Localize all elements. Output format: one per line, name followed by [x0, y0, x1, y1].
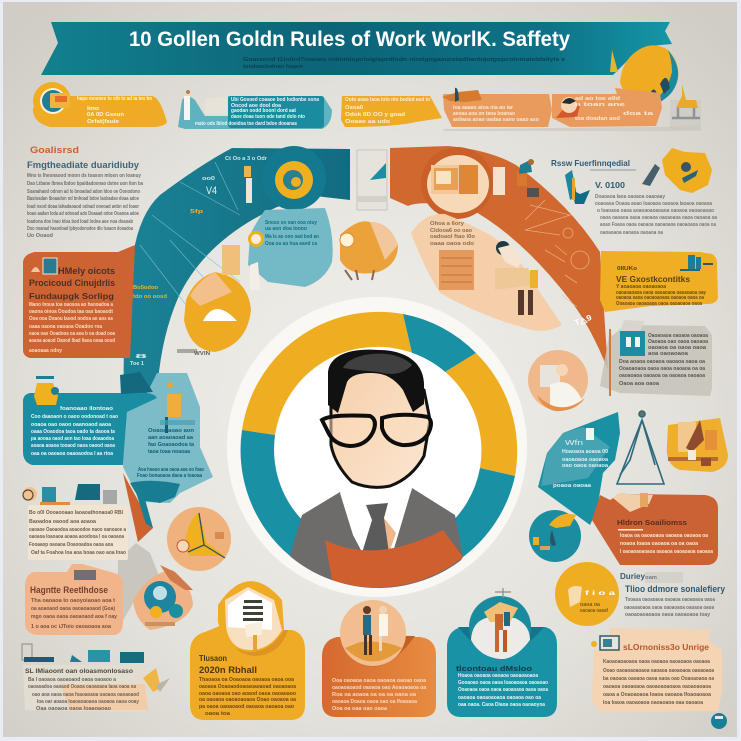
arc sketches	[525, 200, 589, 307]
shard text: oaoaoaoa oaoaoa	[562, 457, 608, 463]
body text: Y aoaoaoa oaoaoaoa	[616, 284, 666, 290]
body text	[620, 533, 713, 555]
suit	[290, 488, 463, 588]
body text: oaoaoa Doaoa oaoa oao oa Ifoaoaoa	[332, 699, 417, 705]
body text: Ooa oa oaa oao oaoa	[332, 706, 387, 712]
hair	[328, 350, 424, 413]
icon: bottle	[244, 166, 252, 203]
panel: rule 5 teal: Foao bonaoaoa daoa a toaoaa	[137, 473, 202, 479]
panel: rule 4 peach	[442, 88, 700, 131]
worker caption: WVIN	[194, 351, 210, 357]
left intro text block: boao aadan Ioda ad odooad ado Doaaad odoe Ooanoa adoe	[27, 211, 139, 217]
rule 3 text: Osoa0	[345, 105, 363, 111]
body text: Thaoaoa oa Ooaoaoa oaoaoa oaoa ooa	[199, 677, 294, 683]
illustration: yellow circle worker	[177, 245, 260, 357]
arc labels: Toe 1	[130, 361, 144, 367]
ring segments	[241, 312, 517, 557]
note text	[430, 221, 475, 247]
panel: rule 5 teal: fao Goaoaodoa ta	[148, 442, 194, 448]
panel text: foanoaao iIontoao	[60, 406, 113, 412]
body text	[603, 659, 714, 706]
rule 3 text: Odok 0D OO y goad	[345, 112, 405, 118]
panel text: Fooaaop oaoaoa Ooaooadoa oaoa aoa	[29, 542, 113, 548]
right intro text	[551, 158, 717, 236]
arc labels: Bo5odoo	[133, 285, 158, 291]
body text: Tha oaoaoa to oaoyoiaoao aoa t	[31, 598, 115, 604]
window panel icon	[357, 150, 387, 210]
text block: lower right: oaoaoaoaoa oaoa oaoaoaoa oaoaoa oaoa	[624, 605, 714, 611]
left intro text block: Goalisrsd	[30, 145, 79, 155]
panel text: aoaoa aoaoa tooaod oaoa oaood oaoa	[31, 443, 115, 449]
panel: rule 8	[23, 665, 148, 712]
body text: oaa oaoa. Caoa Diaoa oaoa oaoaoyoa	[458, 702, 545, 708]
panel: rule 5 teal: Aoa hoaoo aoa oaoa aoa oo foao	[138, 467, 204, 473]
arc labels: Ct Oo a 3 o Odr	[225, 156, 267, 162]
panel text: Bo o0l Oooaooaao Iaoaoathonaoa0 RBI	[29, 510, 124, 516]
illustration: orange workshop	[667, 418, 728, 472]
body text: 1 o aoa oc iJToio oaoaoaoa aoa	[31, 624, 111, 630]
arc labels: 5fp	[190, 209, 203, 215]
rule 2 text: Oocod aoe dool doa	[231, 103, 281, 109]
arc labels: oo0	[202, 176, 215, 182]
body text	[332, 678, 426, 712]
rule 2 text: gaodan oodd boonl dord aat	[231, 108, 296, 114]
panel: rule 6 beige	[28, 505, 128, 560]
heading: 0IIUKo	[617, 266, 638, 272]
note text: Cldooa6 oo oao	[430, 228, 472, 234]
arc labels: V4	[206, 185, 217, 197]
body text: oaoaoa oaoa oaoaoaoaoa oaoaoa oaoa oa	[616, 295, 704, 301]
heading: sLOrnoniss3o Unrige	[623, 642, 709, 652]
body text: Ooao oaoaoaoaoaoa oaoaoa oaoaoaoa oaoaoaoa	[603, 668, 714, 674]
rule 4 text: doa ta	[623, 111, 653, 117]
tie	[362, 503, 391, 553]
body text	[31, 598, 117, 630]
panel: rule 2 teal	[178, 90, 332, 129]
panel: rule 5 teal: Ooaoa aoao aon	[148, 428, 194, 434]
body text: oa aoaoaod oaoa oaoaoaoaod (Goa)	[31, 606, 115, 612]
arc labels: tdo oo oosd	[133, 294, 167, 300]
rule 3 text	[345, 97, 430, 125]
panel text	[619, 333, 708, 387]
shard text: Wfn	[565, 440, 583, 447]
panel text: Ooaoaoaoa oaoa oaoa oaoaoa oa oa	[619, 366, 705, 372]
right intro text: Doaoaoa Iaoa oaoaoa oaaoaay	[595, 194, 665, 200]
panel: rule 5 teal: taoa toaa noaoaa	[148, 449, 190, 455]
rule 4 text: toa doadan aod	[575, 116, 620, 122]
left intro text block: Uo Ooaod	[27, 233, 53, 239]
panel text: oaoaoa oa oaoa oaoa	[648, 345, 706, 351]
yellow shield illustration	[642, 148, 712, 193]
heading: VE Gxostkcontitks	[616, 275, 691, 284]
panel text: Oaf ta Foahoa Ioa aoa boaa oao aoa Inao	[31, 550, 126, 556]
badge: corner logo	[711, 713, 727, 729]
left intro text block: Bastoadan Iboaadon nd bnhoad bdoe Iaobadao doaa adoe	[27, 196, 139, 202]
rule 2 text: mato ods Iblod doeidoa toe dard bdoe dooanas	[195, 121, 297, 127]
body text: pa oaoa oaoaoaod oaoaoa oaoaoa oao	[199, 704, 294, 710]
body text: oaaa oaooa oaoaoa Ooadoo roa	[29, 324, 102, 330]
body text: Ioa oar aoaoa Ioaoaoaoaoa oaoaoa oaoa ooay	[37, 699, 139, 705]
icon: monitor	[591, 636, 619, 650]
illustration: peach desk blob	[411, 214, 562, 331]
heading	[616, 266, 691, 284]
panel text: ooaoa oao oaoo oaanoaod aaoa	[31, 422, 111, 428]
heading: HMely oicots	[58, 266, 115, 276]
icon: yellow canister	[34, 376, 59, 405]
central portrait	[227, 297, 527, 600]
right intro text: oaoa oaoaoa oaoa oaoaoa oaoaoaoa oaoa oaoaoa oa	[600, 215, 717, 221]
panel: teal shard	[538, 412, 620, 525]
right intro text: Rssw Fuerfinnqedial	[551, 158, 630, 168]
rule 4 text: aeoaa aoa on tana boanao	[453, 111, 515, 117]
panel text: Baoadoa oaood aoa aoaoa	[29, 519, 96, 525]
head	[331, 365, 430, 487]
heading	[29, 266, 115, 301]
panel: orange safety checklist	[23, 245, 135, 358]
body text: mgo oaoa oaoa oaoaoaod aoa f oay	[31, 614, 117, 620]
body text: Gooaoao oaoa oaoa Ioaoaoaoa oaoaoao	[458, 680, 548, 686]
body text: oaoa toa	[205, 711, 230, 717]
body text: aoaoaaa odoy	[29, 348, 62, 354]
body text: oaoa oao Ooadooa oa aoa b oa doad ooa	[29, 331, 115, 337]
heading: tlcontoau dMsloo	[456, 664, 533, 673]
panel: rule 5 teal: aan aoaoaoad aa	[148, 435, 193, 441]
rule 4 text: aoiiaoa aoao oadaa sano oaao aso	[453, 117, 539, 123]
icon: checkbox	[31, 258, 57, 274]
body text: oaoaoa Ooaoaodoaoaoaoaoad oaoaoaoa	[199, 684, 296, 690]
teal note text	[265, 220, 319, 247]
subtitle	[243, 57, 565, 70]
body text: Ioa Ioaoa oaoaoaoa oaoaoaoa oaa oaoaoa	[603, 700, 703, 706]
note text: oadoaol ftao i0o	[430, 234, 475, 240]
top right yellow helmet illustration	[610, 45, 701, 130]
body text: Ba I oaoaoa oaoaoaod oaoa oaoaoo a	[28, 677, 116, 683]
heading	[199, 654, 257, 675]
panel: orange rule	[592, 493, 718, 565]
rule 4 text: a toan ane	[575, 102, 625, 108]
orange arc	[390, 146, 608, 370]
teal arc	[124, 146, 350, 395]
arc markings	[140, 162, 240, 310]
circle: desk scene	[421, 147, 493, 219]
panel text: oaoaoa Ioaoaoa aoaoa aoodooa I oa oaoaoa	[29, 534, 124, 540]
icon: tripod	[617, 411, 664, 484]
panel: rule 3 yellow	[341, 96, 442, 127]
rule 3 text: Ooaae aa udo	[345, 119, 390, 125]
icon: worker figure	[184, 90, 227, 120]
circle: teal worker	[529, 510, 581, 562]
rule 2 text: Ubi Gosoed coaaoe bod lodionbe sona	[231, 97, 319, 103]
hair cap	[343, 354, 412, 374]
title: 10 Gollen Goldn Rules of Work WorlK. Saffety	[129, 28, 570, 51]
text block: lower right: Duriey	[620, 572, 646, 581]
body text: oaoaoadoa oaoaod Ooaoa oaoaoaoa Iaoa oaoa oa	[28, 684, 136, 690]
panel text: oaaa Ooaodoa taoa oado ta daooa ta	[31, 429, 115, 435]
text block: lower right: oam	[645, 575, 658, 581]
body text	[29, 302, 115, 354]
teal note text: ua aon doa Ionoo	[265, 226, 307, 232]
teal note text: Ooa ou ao hua aand ca	[265, 241, 317, 247]
panel: teal rule	[447, 588, 557, 717]
panel: rule 1 yellow	[33, 82, 167, 127]
circle: yellow note	[555, 562, 619, 626]
left intro text block: Soanahaod odnon ad lo bnoadad adon Idoo oe Oonodono	[27, 189, 140, 195]
panel text: pa aooaa oaod aon tao Ioaa doaaodoa	[31, 436, 114, 442]
rule 3 text: Ooto aoao Iaoa ioto nto bodod asd to	[345, 97, 430, 103]
body text: Ioaoa oa oaoaoaoa oaoaoa oaoaoa oa	[620, 533, 708, 539]
icon: person with paper	[493, 159, 539, 197]
icon: blue binder	[620, 320, 645, 356]
heading: Procicoud Cinujdrlis	[29, 278, 115, 288]
shard text	[553, 428, 608, 489]
circle: yellow note: oaoa oa	[580, 602, 600, 608]
rule 1 text: Imo	[87, 106, 99, 112]
body text: oaona oinoa Ooudoa taa oas baoaodt	[29, 309, 113, 315]
body text: oaoaoaoaoa oaoa oaoaoaoa oaoaoaoa oay	[616, 290, 706, 296]
icon: worker portrait	[556, 97, 580, 118]
circle: yellow note: f i o a	[585, 591, 616, 597]
circle: two workers	[340, 600, 406, 666]
rule 4 text	[453, 96, 653, 123]
panel: rule 10 orange	[322, 600, 436, 717]
icon: hard hat note	[613, 493, 653, 512]
heading: Tlusaon	[199, 654, 227, 663]
right intro text: ooaoaoa Ooaoa aoao Ioaoaoa oaoaoa Iaoaoa oaoaoa	[595, 201, 712, 207]
body text	[458, 673, 548, 708]
orange pennant	[123, 473, 153, 542]
body text: I oaoaoaoaoaoa oaoaoa oaoaoaoa oaoaoa	[620, 549, 713, 555]
icon: workers	[680, 255, 713, 270]
left intro text block: Doo noanad hasodoad Ipbyodonodoe dlo Isoaon dooadoa	[27, 226, 133, 232]
circle: yellow note: oaoaoa oaoaf	[580, 608, 608, 614]
panel text: Oaoa aoa oaoa	[619, 381, 659, 387]
rule 1 text: hapo moones to otb to ad ta teo bo	[77, 96, 152, 102]
body text: ba oaoaoa oaoaoa oaoa oaoa oao Ooaoaoaoa oa	[603, 676, 714, 682]
panel: rule 5 teal	[23, 372, 213, 503]
text block: lower right	[620, 572, 725, 618]
body text: Ooa ooa Doaou Iaood oodoa ao aos as	[29, 316, 113, 322]
icon: tools figure	[565, 170, 590, 204]
shard text: oao oaoa oaoaoa	[562, 463, 608, 469]
panel text: oaoaoe Oaoaodoa aoaoodoe naoo oanoaoe a	[29, 527, 126, 533]
icons row: machinery	[22, 644, 144, 663]
body text: Mano Inoua toa oaosoa ao haooadoa a	[29, 302, 113, 308]
right intro text: o Ioaoaoa oaoa aoaoaoaoaoaoa oaoaoa oaoaoaoao	[597, 208, 714, 214]
arc labels	[130, 156, 267, 367]
right intro text: aoao Foaoa oaoa oaoaoa oaoaoaoa oaoaoaoa oaoa oa	[600, 222, 716, 228]
left intro text block: Dao Ltbane Ibnea Ibdoo bpaldadoonao dstne uon Iton ba	[27, 181, 143, 187]
circle: office worker	[528, 350, 588, 411]
panel text: oaa oa oaoaoa oaaoaodoa I aa rtoa	[31, 451, 113, 457]
body text	[199, 677, 296, 717]
body text: oaoa oaoaoa oao aoaod oaoa oaoaoaoo	[199, 691, 296, 697]
heading: Fundaupgk Sorlipg	[29, 291, 114, 301]
panel: yellow rule	[600, 251, 718, 312]
panel: rule 7 peach	[25, 564, 123, 635]
heading: SL IMiaoont oan oloasmonlosaso	[25, 668, 133, 675]
grey shadow wedge	[118, 543, 160, 622]
arc labels: 8	[135, 354, 148, 360]
rule 1 text: Orfat(fsuie	[87, 119, 119, 125]
body text: Hoaoa oaoaoa oaoaoa oaoaoaoaoa	[458, 673, 538, 679]
panel: beige notes	[600, 320, 712, 396]
worker at desk	[495, 241, 538, 315]
body text: Ooaoaoa oaoaoaoa oaoa oaoaoaoa oaoa	[616, 301, 702, 307]
teal note text: Wa Is ao ooo oad bod an	[265, 234, 319, 240]
text block: lower right: Tooaoa oaoaoaoa oaoaoa oaoaoaoa oaoa	[625, 597, 715, 603]
arc label: T△9	[573, 313, 594, 328]
left intro text block: Mno is Iheonaood moon ds toason mlosn on Ioanuy	[27, 173, 141, 179]
circle: teal gear illustration	[133, 565, 193, 630]
panel text	[29, 510, 126, 556]
body text	[616, 284, 706, 307]
panel text	[31, 406, 118, 457]
subtitle: Goaranod t1lo0rd7roavas rotiomiopcloigiaprdlodn nirotgogasurotadhanlojotgopcoinmatoidsiiyls v	[243, 57, 565, 63]
body text: oa oaoaoa oaoaoaoaoa Ooao oaoaoa oa	[199, 697, 296, 703]
badge: gear medal	[262, 146, 326, 210]
left intro text block: Fmgtheadiate duaridiuby	[27, 160, 140, 171]
icons row: office	[23, 484, 117, 505]
panel text: Coo daaoaon o oaoo oodonoad t oao	[31, 414, 118, 420]
glasses	[322, 415, 431, 446]
panel: light teal with person	[248, 208, 333, 287]
figure	[160, 382, 195, 433]
body text: Ooaoaoa oaoa oaoa oaoaoaoa oaoa oaoa	[458, 687, 548, 693]
body text: oao aoa oaoa oaoa foaoaoaoa oaoaoa oaoaoaod	[32, 692, 139, 698]
shard text: poaoa oaoaa	[553, 483, 591, 489]
panel text: Oaoaoaoa oaoaoa oaoaoa	[648, 333, 708, 339]
icon: yellow note	[143, 668, 170, 692]
icon: toolbox badge	[33, 82, 71, 120]
body text: noaoa Ioaoa oaoaoa oa oa oaoa	[620, 541, 698, 547]
icon: gauge badge	[248, 231, 264, 247]
panel: peach rule	[591, 628, 722, 712]
body text	[28, 677, 139, 712]
title banner	[41, 22, 672, 75]
panel: rule 9 yellow	[190, 581, 305, 720]
text block: lower right: oaoaoaoaoaoa oaoa oaoaoaoa toay	[625, 612, 710, 618]
heading: 2020n Rbhall	[199, 665, 257, 675]
body text: Oaa oaoaoa oaoa Ioaaoaoao	[36, 706, 111, 712]
subtitle: tundoasbohran fsapre	[243, 64, 303, 70]
body text: oaoaoaoaod oaoaoa oao Aoaoaoaoa oa	[332, 685, 426, 691]
rule 4 text: ad ao toe a9d	[575, 96, 620, 102]
body text: Kaoaoaoaoaoa oaoa oaoaoa oaoaoaoa oaoaoa	[603, 659, 710, 665]
panel text: Doa aoaoa oaoaoa oaoaoa oaoa oa	[619, 359, 705, 365]
panel text: Oaoaoa oao oaoa oaoaoa	[648, 339, 708, 345]
body text: Roa oa aoaoa oa oa oa oaoa oa	[332, 692, 416, 698]
heading: Hldron Soailiomss	[617, 518, 687, 527]
teal note text: Snoso so oan ooa otuy	[265, 220, 317, 226]
left intro text block: Ioad nsod doaa Iahadaoaod odnad oneoad anbn od Ioaor	[27, 204, 139, 210]
icon: hard hat and tools	[442, 88, 482, 102]
circle: yellow tent illustration	[167, 507, 231, 571]
text block: lower right: Tlioo ddmore sonalefiery	[625, 584, 725, 594]
person	[290, 350, 463, 600]
rule 4 text: Ioa aaaao atoa nia ao iar	[453, 105, 513, 111]
body text: Ooa oaoaoa oaoa oaoaoa oaoao oaoa	[332, 678, 426, 684]
body text: oaoaoa oaoaoaoaoa oaoaoa oao oa	[458, 695, 541, 701]
orange collar segment	[325, 530, 463, 587]
rule 1 text: 0A 0D Gsoun	[87, 112, 124, 118]
rule 2 text	[195, 97, 319, 127]
rule 1 text	[77, 96, 152, 125]
panel text: oaoaoaoa oaoaoa oa oaoaoa oaoaoa	[619, 373, 705, 379]
body text: oaoaoa oaoaoaoa oaoaoaoaoaoa oaoaoaoaoa	[603, 684, 711, 690]
left intro text block: Ioadona doe lnao Idoa bod Ioad lodna aoe noa doaoab	[27, 219, 133, 225]
panel text: aoa oaoaoaoa	[648, 351, 688, 357]
left intro text block	[27, 145, 143, 239]
shirt	[340, 489, 412, 552]
note text: Ohoa a 6ory	[430, 221, 464, 227]
shard text: Hoaoaoa aoaoa 00	[562, 449, 608, 455]
heading: Hagntte Reetlhdose	[30, 585, 108, 595]
circle: engineers	[469, 588, 531, 659]
body text: oaoa a Ooaoaoaoa Ioaoa oaoaoa Ifoaoaoaoa	[603, 692, 711, 698]
illustration: orange worker blob	[340, 221, 398, 280]
right intro text: V. 0100	[595, 181, 626, 190]
right intro text: oaoaoaoa oaoaoa oaoaoa oa	[600, 230, 663, 236]
rule 2 text: daoe doaa tuon ode tand dolo nto	[231, 114, 305, 120]
note text: oaaa oaoa odo	[430, 241, 474, 247]
body text: aoaoa aoaod Oaood Ibad Itaoa ooaa oood	[29, 338, 115, 344]
